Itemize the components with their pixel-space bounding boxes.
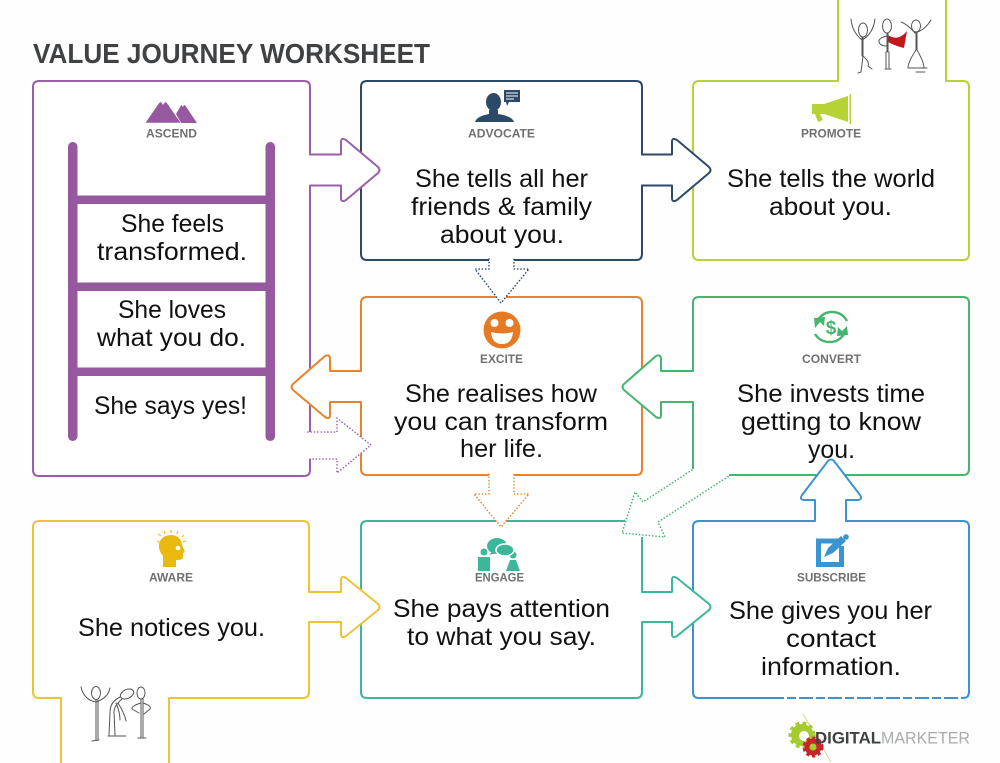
text: she says yes: She says yes! <box>94 392 247 420</box>
dotted arrow: excite to engage <box>474 474 529 527</box>
text: she feels transformed <box>97 210 247 266</box>
panel: engage <box>361 521 710 698</box>
logo: digital marketer: MARKETER <box>881 728 970 748</box>
text: convert: getting to know <box>741 408 922 436</box>
text: convert: you. <box>808 436 855 464</box>
icon: megaphone <box>812 94 851 124</box>
text: subscribe: She gives you her <box>729 597 932 625</box>
label: engage: ENGAGE <box>475 570 524 584</box>
icon: edit pencil <box>818 534 849 564</box>
text: subscribe <box>729 597 932 681</box>
icon: money cycle: $ <box>826 318 837 339</box>
label: ascend: ASCEND <box>146 126 197 140</box>
text: engage <box>393 595 610 651</box>
text: advocate: about you. <box>440 221 564 249</box>
icon: money cycle <box>814 312 848 342</box>
dotted arrow: advocate to excite <box>475 259 529 303</box>
text: she loves what you do: She loves <box>118 296 226 324</box>
panel: subscribe <box>693 460 969 698</box>
label: promote: PROMOTE <box>801 126 861 140</box>
text: excite <box>394 380 608 463</box>
label: aware: AWARE <box>149 570 193 584</box>
text: advocate: friends & family <box>411 193 593 221</box>
icon: mountains <box>145 97 197 123</box>
text: engage: to what you say. <box>407 623 596 651</box>
text: aware: She notices you. <box>78 614 265 642</box>
text: she feels transformed: She feels <box>121 210 224 238</box>
icon: head with idea rays <box>157 530 186 567</box>
logo: digital marketer: DIGITAL <box>815 728 881 748</box>
text: convert <box>737 380 925 464</box>
dotted arrow: ascend to excite <box>308 418 371 473</box>
icon: person with speech bubble <box>475 90 520 122</box>
text: she loves what you do <box>96 296 246 352</box>
panel: convert <box>622 297 969 475</box>
text: subscribe: contact <box>786 625 876 653</box>
panel: aware <box>33 521 380 763</box>
text: she feels transformed: transformed. <box>97 238 247 266</box>
ladder <box>68 142 275 441</box>
text: convert: She invests time <box>737 380 925 408</box>
text: excite: her life. <box>460 435 543 463</box>
title: VALUE JOURNEY WORKSHEET <box>33 38 430 69</box>
panel: ascend <box>33 81 380 476</box>
text: promote: She tells the world <box>727 165 935 193</box>
text: engage: She pays attention <box>393 595 610 623</box>
icon: two people talking <box>478 538 520 571</box>
panel: excite <box>292 297 642 475</box>
label: convert: CONVERT <box>802 352 862 366</box>
text: she loves what you do: what you do. <box>96 324 246 352</box>
text: advocate <box>411 165 593 249</box>
label: subscribe: SUBSCRIBE <box>797 570 866 584</box>
dotted arrow: convert to engage <box>622 470 729 537</box>
text: promote: about you. <box>769 193 892 221</box>
text: advocate: She tells all her <box>415 165 588 193</box>
bottom dashed edge <box>770 697 963 699</box>
icon: three stick figures <box>81 686 150 741</box>
text: subscribe: information. <box>761 653 901 681</box>
logo: digital marketer <box>791 714 970 762</box>
icon: celebrating stick figures with red cape <box>851 19 931 73</box>
icon: smiley <box>484 312 520 348</box>
panel: advocate <box>361 81 710 260</box>
label: advocate: ADVOCATE <box>468 126 535 140</box>
text: excite: you can transform <box>394 408 608 436</box>
text: excite: She realises how <box>405 380 598 408</box>
label: excite: EXCITE <box>480 352 523 366</box>
text: promote <box>727 165 935 221</box>
panel: promote <box>693 0 969 260</box>
